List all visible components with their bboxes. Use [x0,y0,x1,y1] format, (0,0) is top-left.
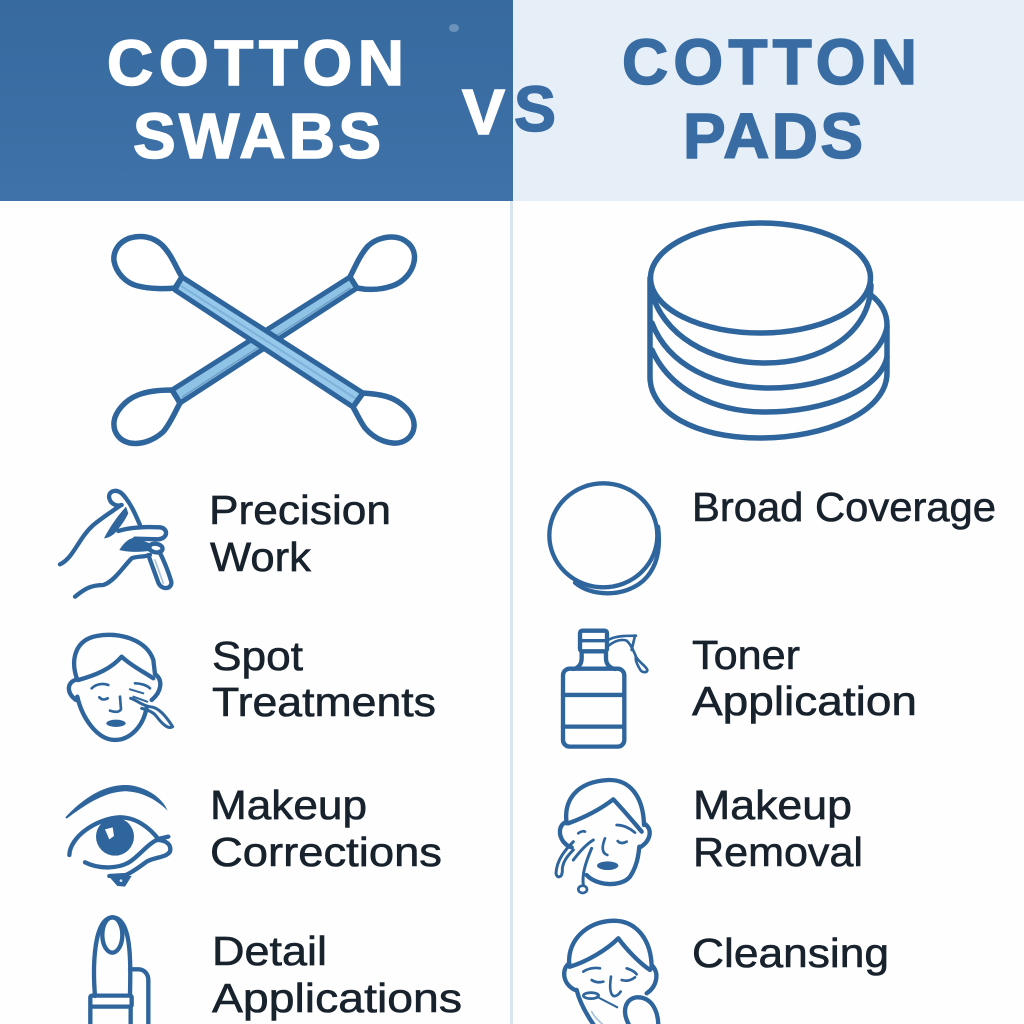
text: makeup corrections: Corrections [210,829,442,875]
heading: cotton swabs [107,27,404,172]
row: spot treatments [69,633,436,740]
text: makeup corrections: Makeup [210,782,367,828]
text: precision work: Precision [209,487,391,533]
text: spot treatments [212,633,436,725]
row: toner application [563,631,917,747]
text: detail applications [212,928,462,1021]
row: broad coverage [549,483,996,593]
heading: cotton pads: COTTON [622,26,917,98]
heading: cotton swabs: SWABS [133,100,381,172]
row: precision work [60,487,391,597]
row: makeup corrections [65,782,442,887]
icon: fingertip [90,917,148,1024]
text: spot treatments: Spot [212,633,304,679]
text: toner application [692,632,917,724]
icon: single cotton pad [549,483,659,593]
heading: cotton pads: PADS [683,100,863,172]
text: makeup removal: Removal [693,829,863,875]
text: detail applications: Detail [212,928,327,974]
icon: eye with swab [65,785,170,887]
header panel: cotton pads [513,0,1024,201]
text: detail applications: Applications [212,975,462,1021]
row: cleansing [564,921,889,1024]
row: detail applications [90,917,462,1024]
versus label: V [462,76,505,148]
icon: face with cleansing pad [564,921,658,1024]
icon: toner bottle [563,631,647,747]
heading: cotton pads [622,26,917,172]
icon: face with swab at eye [69,635,173,740]
row: makeup removal [556,780,863,893]
icon: hand holding swab [60,491,171,597]
text: precision work [209,487,391,580]
text: precision work: Work [210,534,312,580]
header panel: cotton swabs [0,0,513,201]
text: spot treatments: Treatments [212,679,436,725]
icon: stack of cotton pads [650,223,887,438]
text: cleansing: Cleansing [692,930,889,976]
versus label: S [514,73,556,145]
text: makeup corrections [210,782,442,875]
text: toner application: Toner [692,632,800,678]
versus label [462,73,556,148]
text: makeup removal [693,782,863,875]
heading: cotton swabs: COTTON [107,27,404,99]
icon: face with pad wiping eye [556,780,650,893]
text: broad coverage: Broad Coverage [692,484,996,530]
text: toner application: Application [692,678,917,724]
text: makeup removal: Makeup [693,782,852,828]
icon: crossed cotton swabs [114,236,414,443]
